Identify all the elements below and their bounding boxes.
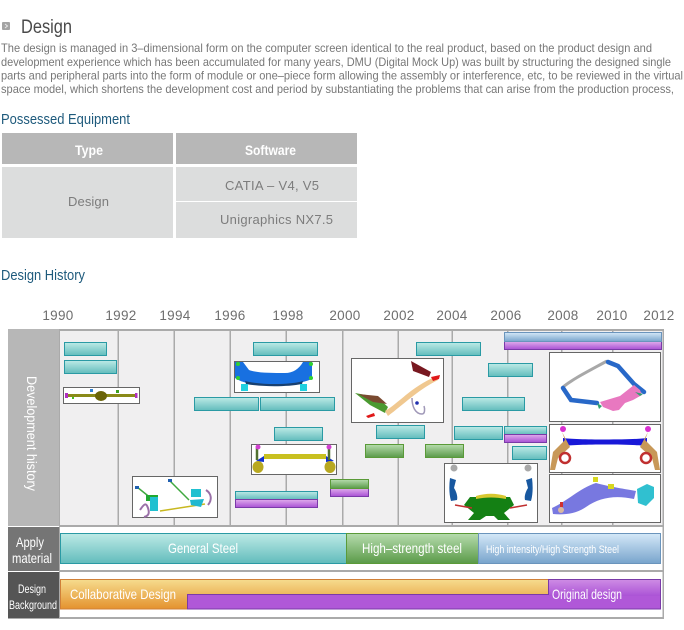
table cell: catia: CATIA – V4, V5: [225, 178, 319, 193]
year axis: 1998: [272, 308, 304, 323]
table cell: unigraphics: [176, 202, 357, 238]
row label: design background: Design: [18, 582, 46, 596]
plot background: [60, 331, 663, 525]
equipment table: [2, 133, 357, 238]
development bars: [64, 332, 662, 508]
table cell: catia: [176, 167, 357, 201]
heading: possessed equipment: Possessed Equipment: [1, 111, 131, 128]
image: lower control arm: [550, 474, 660, 522]
year axis: 1996: [214, 308, 246, 323]
year axis: 2000: [329, 308, 361, 323]
image: multi-link suspension: [132, 476, 218, 518]
table header: software: Software: [245, 142, 296, 158]
year axis: 2004: [436, 308, 468, 323]
image: pedal beam: [352, 358, 444, 422]
table header: type: Type: [75, 142, 103, 158]
image: complete subframe assembly: [444, 464, 538, 522]
material bar: high intensity: [478, 534, 660, 564]
row label: design background: [8, 572, 59, 618]
year axis: 1994: [159, 308, 191, 323]
row label: design background: Background: [9, 598, 57, 612]
design bar: original design: [188, 580, 660, 609]
section icon: [2, 22, 10, 30]
material bar: general steel: [60, 534, 346, 564]
design bar: original design: Original design: [552, 586, 622, 602]
image: yellow beam suspension: [252, 444, 336, 474]
table cell: unigraphics: Unigraphics NX7.5: [220, 212, 333, 227]
intro paragraph: The design is managed in 3–dimensional form on the computer screen identical to the real product, based on the product design and: [1, 41, 652, 55]
table cell: design: [2, 167, 173, 238]
year axis: 2008: [547, 308, 579, 323]
row label: apply material: material: [12, 550, 52, 566]
image: rear axle: [64, 388, 140, 404]
material bar: high intensity: High intensity/High Strength Steel: [486, 544, 619, 556]
row label: apply material: Apply: [16, 534, 44, 550]
year axis: 1992: [105, 308, 137, 323]
year axis: 2006: [490, 308, 522, 323]
row label: development history: Development history: [24, 376, 40, 491]
table header: software: [176, 133, 357, 164]
design bar: collaborative design: [60, 580, 548, 609]
heading: design history: Design History: [1, 267, 85, 284]
year axis: [42, 308, 675, 323]
timeline chart: [8, 329, 664, 619]
year axis: 2002: [383, 308, 415, 323]
material bar: high-strength steel: [346, 534, 478, 564]
row label: apply material: [8, 527, 59, 571]
image: blue beam: [550, 424, 660, 472]
year axis: 2012: [643, 308, 675, 323]
intro paragraph: [1, 41, 683, 96]
title: Design: [21, 17, 72, 38]
year axis: 2010: [596, 308, 628, 323]
row label: development history: [8, 329, 59, 526]
material bar: high-strength steel: High–strength steel: [362, 540, 462, 556]
image: blue subframe: [234, 362, 320, 392]
material bar: general steel: General Steel: [168, 540, 238, 556]
image: pink and blue subframe: [550, 352, 660, 422]
year axis: 1990: [42, 308, 74, 323]
design bar: collaborative design: Collaborative Design: [70, 586, 176, 602]
table cell: design: Design: [68, 194, 109, 209]
table header: type: [2, 133, 173, 164]
